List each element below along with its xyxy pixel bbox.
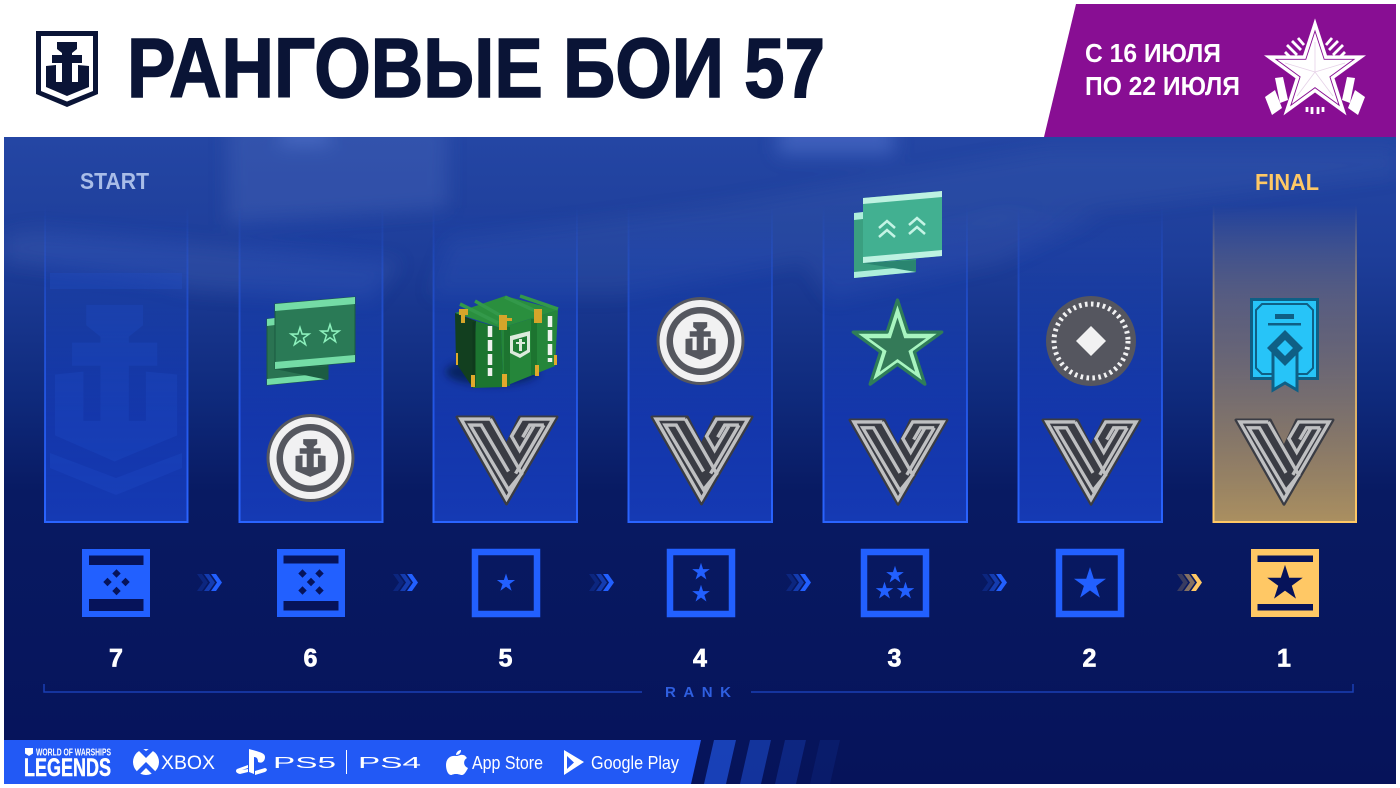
rank 5 badge bbox=[475, 552, 537, 614]
rank 4 badge bbox=[670, 552, 732, 614]
app store logo: App Store bbox=[472, 753, 543, 773]
arrow 7 to 6 bbox=[197, 574, 222, 591]
icon: rank chevron bbox=[457, 417, 557, 504]
xbox logo: XBOX bbox=[161, 753, 215, 774]
panel: rank 7 bbox=[45, 205, 188, 523]
arrow 6 to 5 bbox=[393, 574, 418, 591]
panel: rank 5 bbox=[433, 205, 578, 523]
footer bbox=[4, 740, 840, 784]
playstation logos bbox=[236, 749, 421, 775]
icon: blue certificate bbox=[1252, 300, 1318, 390]
rank numbers bbox=[109, 644, 1291, 672]
rank 1 badge bbox=[1251, 549, 1319, 617]
dates bbox=[1085, 38, 1240, 101]
xbox logo bbox=[133, 749, 215, 775]
rank 3 badge bbox=[864, 552, 926, 614]
arrow 2 to 1 bbox=[1177, 574, 1202, 591]
panel: rank 6 bbox=[239, 205, 383, 523]
app store logo bbox=[446, 750, 543, 775]
arrow 3 to 2 bbox=[982, 574, 1007, 591]
START label: START bbox=[80, 168, 149, 194]
legends logo: LEGENDS bbox=[24, 754, 111, 782]
icon: rank chevron bbox=[850, 420, 947, 504]
rank numbers: 7 bbox=[109, 644, 123, 672]
panel: rank 1 final bbox=[1213, 205, 1357, 523]
dates: ПО 22 ИЮЛЯ bbox=[1085, 71, 1240, 101]
icon: faint start emblem bbox=[50, 273, 182, 495]
logo shield bbox=[36, 31, 98, 107]
playstation logos: PS5 bbox=[273, 755, 336, 772]
panel: rank 2 bbox=[1018, 205, 1162, 523]
icon: grey diamond coin bbox=[1046, 296, 1136, 386]
icon: ranked star emblem bbox=[1265, 24, 1365, 115]
google play logo bbox=[564, 750, 679, 775]
icon: green star flag bbox=[267, 297, 355, 385]
icon: silver coin bbox=[266, 414, 354, 502]
rank 7 badge bbox=[82, 549, 150, 617]
rank numbers: 4 bbox=[693, 644, 707, 672]
icon: rank chevron bbox=[652, 417, 752, 504]
legends logo: WORLD OF WARSHIPS bbox=[36, 748, 111, 758]
date panel bbox=[1044, 4, 1396, 137]
panel: rank 4 bbox=[628, 205, 772, 523]
blurred ship backdrop bbox=[8, 137, 1054, 292]
rank 6 badge bbox=[277, 549, 345, 617]
arrow 5 to 4 bbox=[589, 574, 614, 591]
icon: green crate bbox=[446, 296, 558, 388]
rank axis bbox=[44, 684, 1353, 701]
icon: rank chevron bbox=[1043, 420, 1140, 504]
footer stripes bbox=[704, 740, 840, 784]
playstation logos: PS4 bbox=[358, 755, 421, 772]
panel: rank 3 bbox=[823, 191, 968, 523]
rank numbers: 1 bbox=[1277, 644, 1291, 672]
FINAL label: FINAL bbox=[1255, 169, 1319, 195]
rank numbers: 2 bbox=[1083, 644, 1096, 672]
title: РАНГОВЫЕ БОИ 57 bbox=[127, 21, 825, 115]
icon: green star bbox=[853, 300, 942, 384]
rank label: RANK bbox=[665, 684, 731, 701]
dates: С 16 ИЮЛЯ bbox=[1085, 38, 1221, 68]
header bbox=[36, 4, 1396, 137]
rank 2 badge bbox=[1059, 552, 1121, 614]
rank numbers: 5 bbox=[499, 644, 513, 672]
arrow 4 to 3 bbox=[786, 574, 811, 591]
icon: silver coin bbox=[656, 297, 744, 385]
icon: teal chevron flag bbox=[854, 191, 942, 278]
rank numbers: 3 bbox=[888, 644, 901, 672]
legends logo bbox=[24, 748, 111, 782]
google play logo: Google Play bbox=[591, 753, 679, 773]
rank numbers: 6 bbox=[304, 644, 317, 672]
icon: rank chevron bbox=[1236, 420, 1333, 504]
